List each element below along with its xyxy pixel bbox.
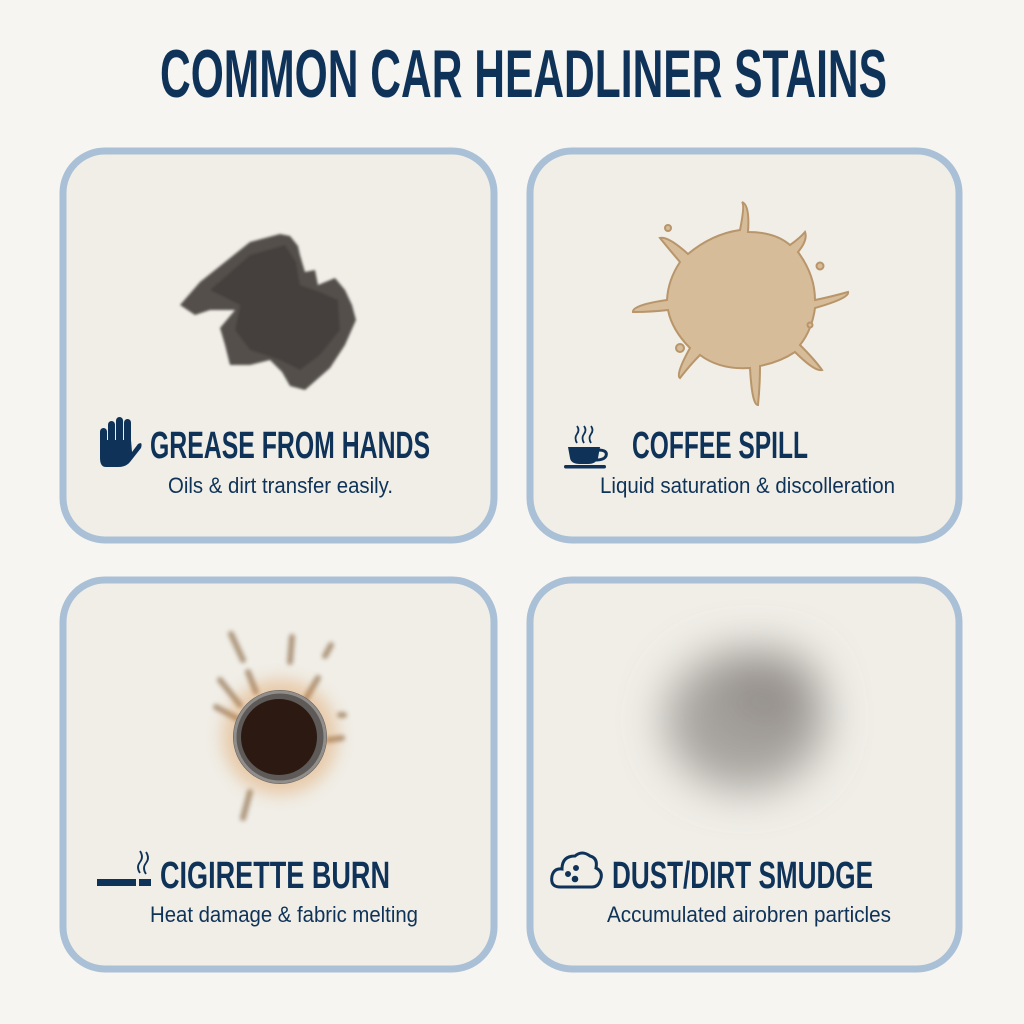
icon: dust cloud [552, 853, 601, 887]
panel: grease from hands [63, 151, 494, 540]
panel: dust/dirt smudge [530, 580, 959, 969]
burn mark [216, 634, 344, 818]
description: Oils & dirt transfer easily. [168, 473, 393, 498]
heading: DUST/DIRT SMUDGE [612, 855, 873, 897]
heading: GREASE FROM HANDS [150, 425, 430, 467]
grease stain [180, 234, 356, 390]
dust smudge [665, 650, 825, 790]
panel: coffee spill [530, 151, 959, 540]
panel: cigarette burn [63, 580, 494, 969]
description: Liquid saturation & discolleration [600, 473, 895, 498]
description: Accumulated airobren particles [607, 902, 891, 927]
description: Heat damage & fabric melting [150, 902, 418, 927]
icon: hand [100, 417, 142, 467]
heading: CIGIRETTE BURN [160, 855, 390, 897]
coffee stain [633, 202, 848, 405]
heading: COFFEE SPILL [632, 425, 808, 467]
icon: coffee cup [564, 426, 606, 468]
icon: cigarette [97, 851, 151, 886]
